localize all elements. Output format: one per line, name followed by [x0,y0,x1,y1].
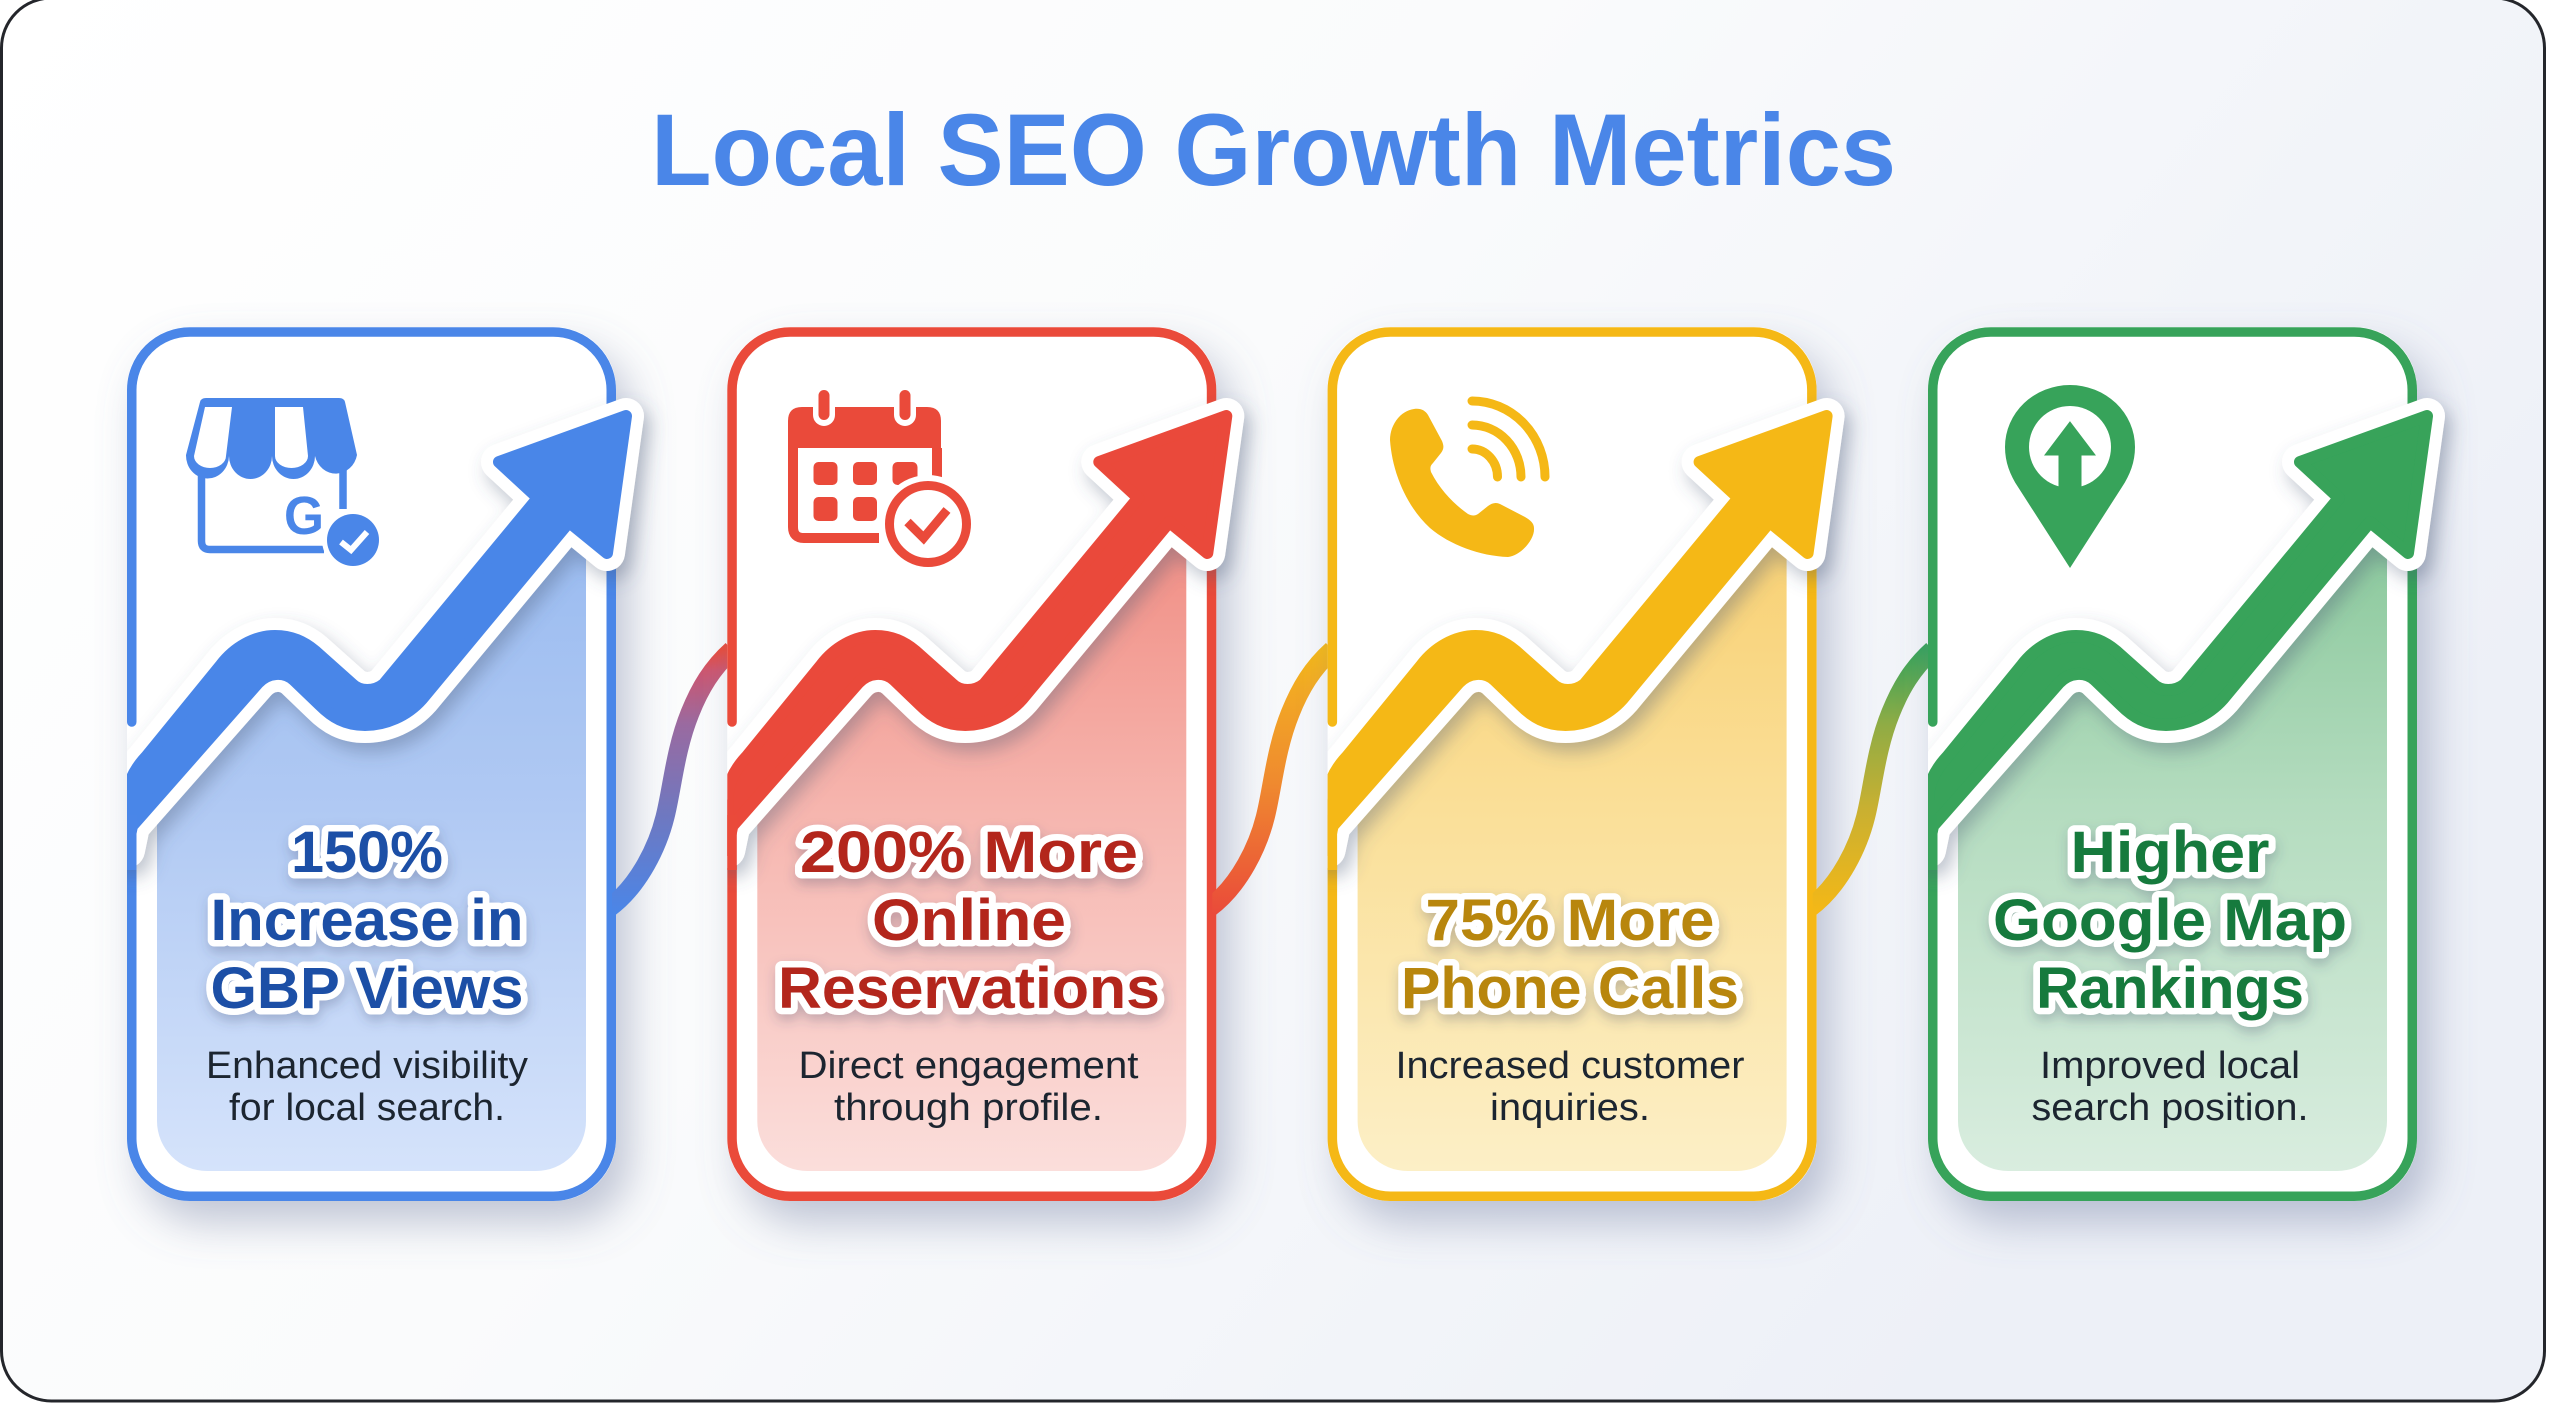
shell: fill, border and arrow [1928,332,2427,1196]
panel: phone calls [1328,327,1827,1201]
description: for local search. [229,1087,505,1129]
headline: Higher [2070,820,2270,885]
description: inquiries. [1490,1087,1650,1129]
headline: Online [872,888,1066,953]
fill area [157,510,586,1171]
headline: 200% More [800,820,1138,885]
headline: 150% [291,820,443,885]
description: Enhanced visibility [206,1045,528,1087]
description: through profile. [834,1087,1103,1129]
headline: Increase in [210,888,524,953]
growth arrow [127,416,626,850]
panel: map rankings [1928,327,2427,1201]
shell: fill, border and arrow [727,332,1226,1196]
description [1396,1045,1745,1129]
panel: GBP views [127,327,626,1201]
description [2032,1045,2308,1129]
panel: online reservations [727,327,1226,1201]
icon: storefront with G [186,398,384,571]
headline [210,820,524,1021]
card border [132,332,611,1196]
description: Increased customer [1396,1045,1745,1087]
icon: storefront with G: G [284,486,324,546]
headline: 75% More [1426,888,1714,953]
title: Local SEO Growth Metrics [651,93,1896,207]
description: Direct engagement [798,1045,1139,1087]
description [798,1045,1139,1129]
connector: yellow to green [1810,650,1933,908]
headline [1401,888,1739,1021]
headline [1993,820,2347,1021]
icon: map pin with up arrow [2005,385,2135,568]
headline: Phone Calls [1401,956,1739,1021]
headline: GBP Views [210,956,524,1021]
icon: calendar with check [788,390,977,573]
headline: Reservations [778,956,1160,1021]
headline: Rankings [2036,956,2304,1021]
card base [1928,327,2417,1201]
card base [127,327,616,1201]
connector: blue to red [609,650,732,908]
description: search position. [2032,1087,2308,1129]
description [206,1045,528,1129]
headline [778,820,1160,1021]
description: Improved local [2040,1045,2300,1087]
border patch [127,815,136,870]
connector: red to yellow [1209,650,1332,908]
headline: Google Map [1993,888,2347,953]
card base [1328,327,1817,1201]
shell: fill, border and arrow [1328,332,1827,1196]
card base [727,327,1216,1201]
icon: phone with signal [1390,401,1545,557]
